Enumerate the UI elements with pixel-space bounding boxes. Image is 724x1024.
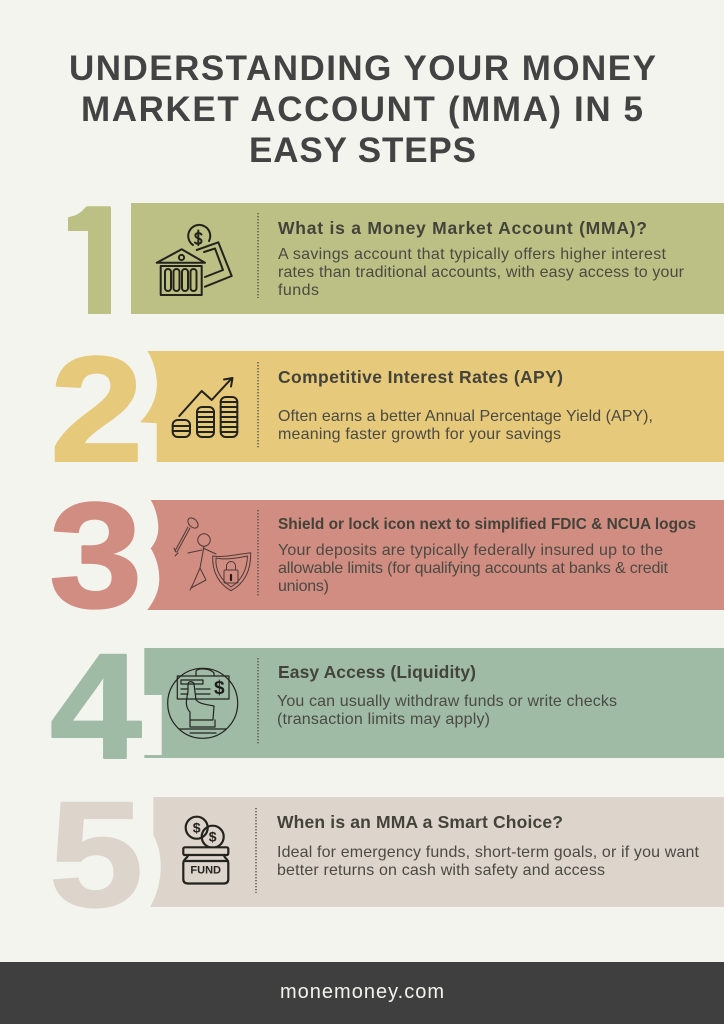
divider [255, 808, 257, 893]
number 5: 5 [49, 770, 143, 938]
panel: step 2 [50, 325, 724, 493]
band 1 [131, 203, 724, 314]
description [277, 693, 617, 728]
heading: Easy Access (Liquidity) [278, 662, 476, 682]
panel: step 4 [50, 623, 724, 790]
description: unions) [278, 578, 329, 595]
panel: step 5 [49, 770, 724, 938]
footer website: monemoney.com [280, 981, 444, 1003]
title: EASY STEPS [249, 131, 476, 170]
description: meaning faster growth for your savings [278, 426, 561, 443]
divider [257, 362, 259, 448]
description: Often earns a better Annual Percentage Yield (APY), [278, 408, 653, 425]
description [278, 246, 685, 299]
description [278, 542, 669, 595]
icon: fund jar with coins [183, 817, 228, 884]
footer bar [0, 962, 724, 1024]
description: allowable limits (for qualifying accounts at banks & credit [278, 560, 669, 577]
band 5 [150, 797, 724, 907]
number 2: 2 [50, 325, 143, 493]
description: rates than traditional accounts, with easy access to your [278, 264, 685, 281]
icon: dollar sign: $ [214, 678, 225, 699]
title: MARKET ACCOUNT (MMA) IN 5 [81, 90, 643, 129]
divider [257, 213, 259, 298]
description: Your deposits are typically federally insured up to the [278, 542, 663, 559]
description: A savings account that typically offers higher interest [278, 246, 667, 263]
icon: stick figure with key and shield [174, 516, 251, 591]
description: Ideal for emergency funds, short-term goals, or if you want [277, 844, 700, 861]
description [277, 844, 700, 879]
title: UNDERSTANDING YOUR MONEY [69, 49, 656, 88]
panel: step 3 [49, 471, 724, 639]
heading: Competitive Interest Rates (APY) [278, 367, 563, 387]
divider [257, 510, 259, 596]
heading: What is a Money Market Account (MMA)? [278, 218, 647, 238]
icon: fund label: FUND [190, 864, 221, 876]
icon: coins and growth arrow [173, 378, 237, 437]
divider [257, 658, 259, 745]
icon: coin dollar signs [193, 820, 217, 845]
title [69, 49, 656, 170]
icon: hand holding check [168, 668, 238, 738]
description: (transaction limits may apply) [277, 711, 490, 728]
heading: Shield or lock icon next to simplified FDIC & NCUA logos [278, 516, 696, 533]
description: funds [278, 282, 319, 299]
description [278, 408, 653, 443]
number 3: 3 [49, 471, 142, 639]
description: You can usually withdraw funds or write checks [277, 693, 617, 710]
number 4: 4 [50, 623, 142, 790]
icon: coin dollar signs: $ [193, 820, 201, 836]
band 4 [144, 648, 724, 758]
band 2 [140, 351, 724, 462]
panel: step 1 [68, 203, 724, 314]
icon: coin dollar signs: $ [209, 829, 217, 845]
number 1: 1 [48, 177, 140, 344]
band 3 [147, 500, 724, 610]
heading: When is an MMA a Smart Choice? [277, 812, 563, 832]
description: better returns on cash with safety and access [277, 862, 605, 879]
icon: bank and money [157, 225, 232, 295]
